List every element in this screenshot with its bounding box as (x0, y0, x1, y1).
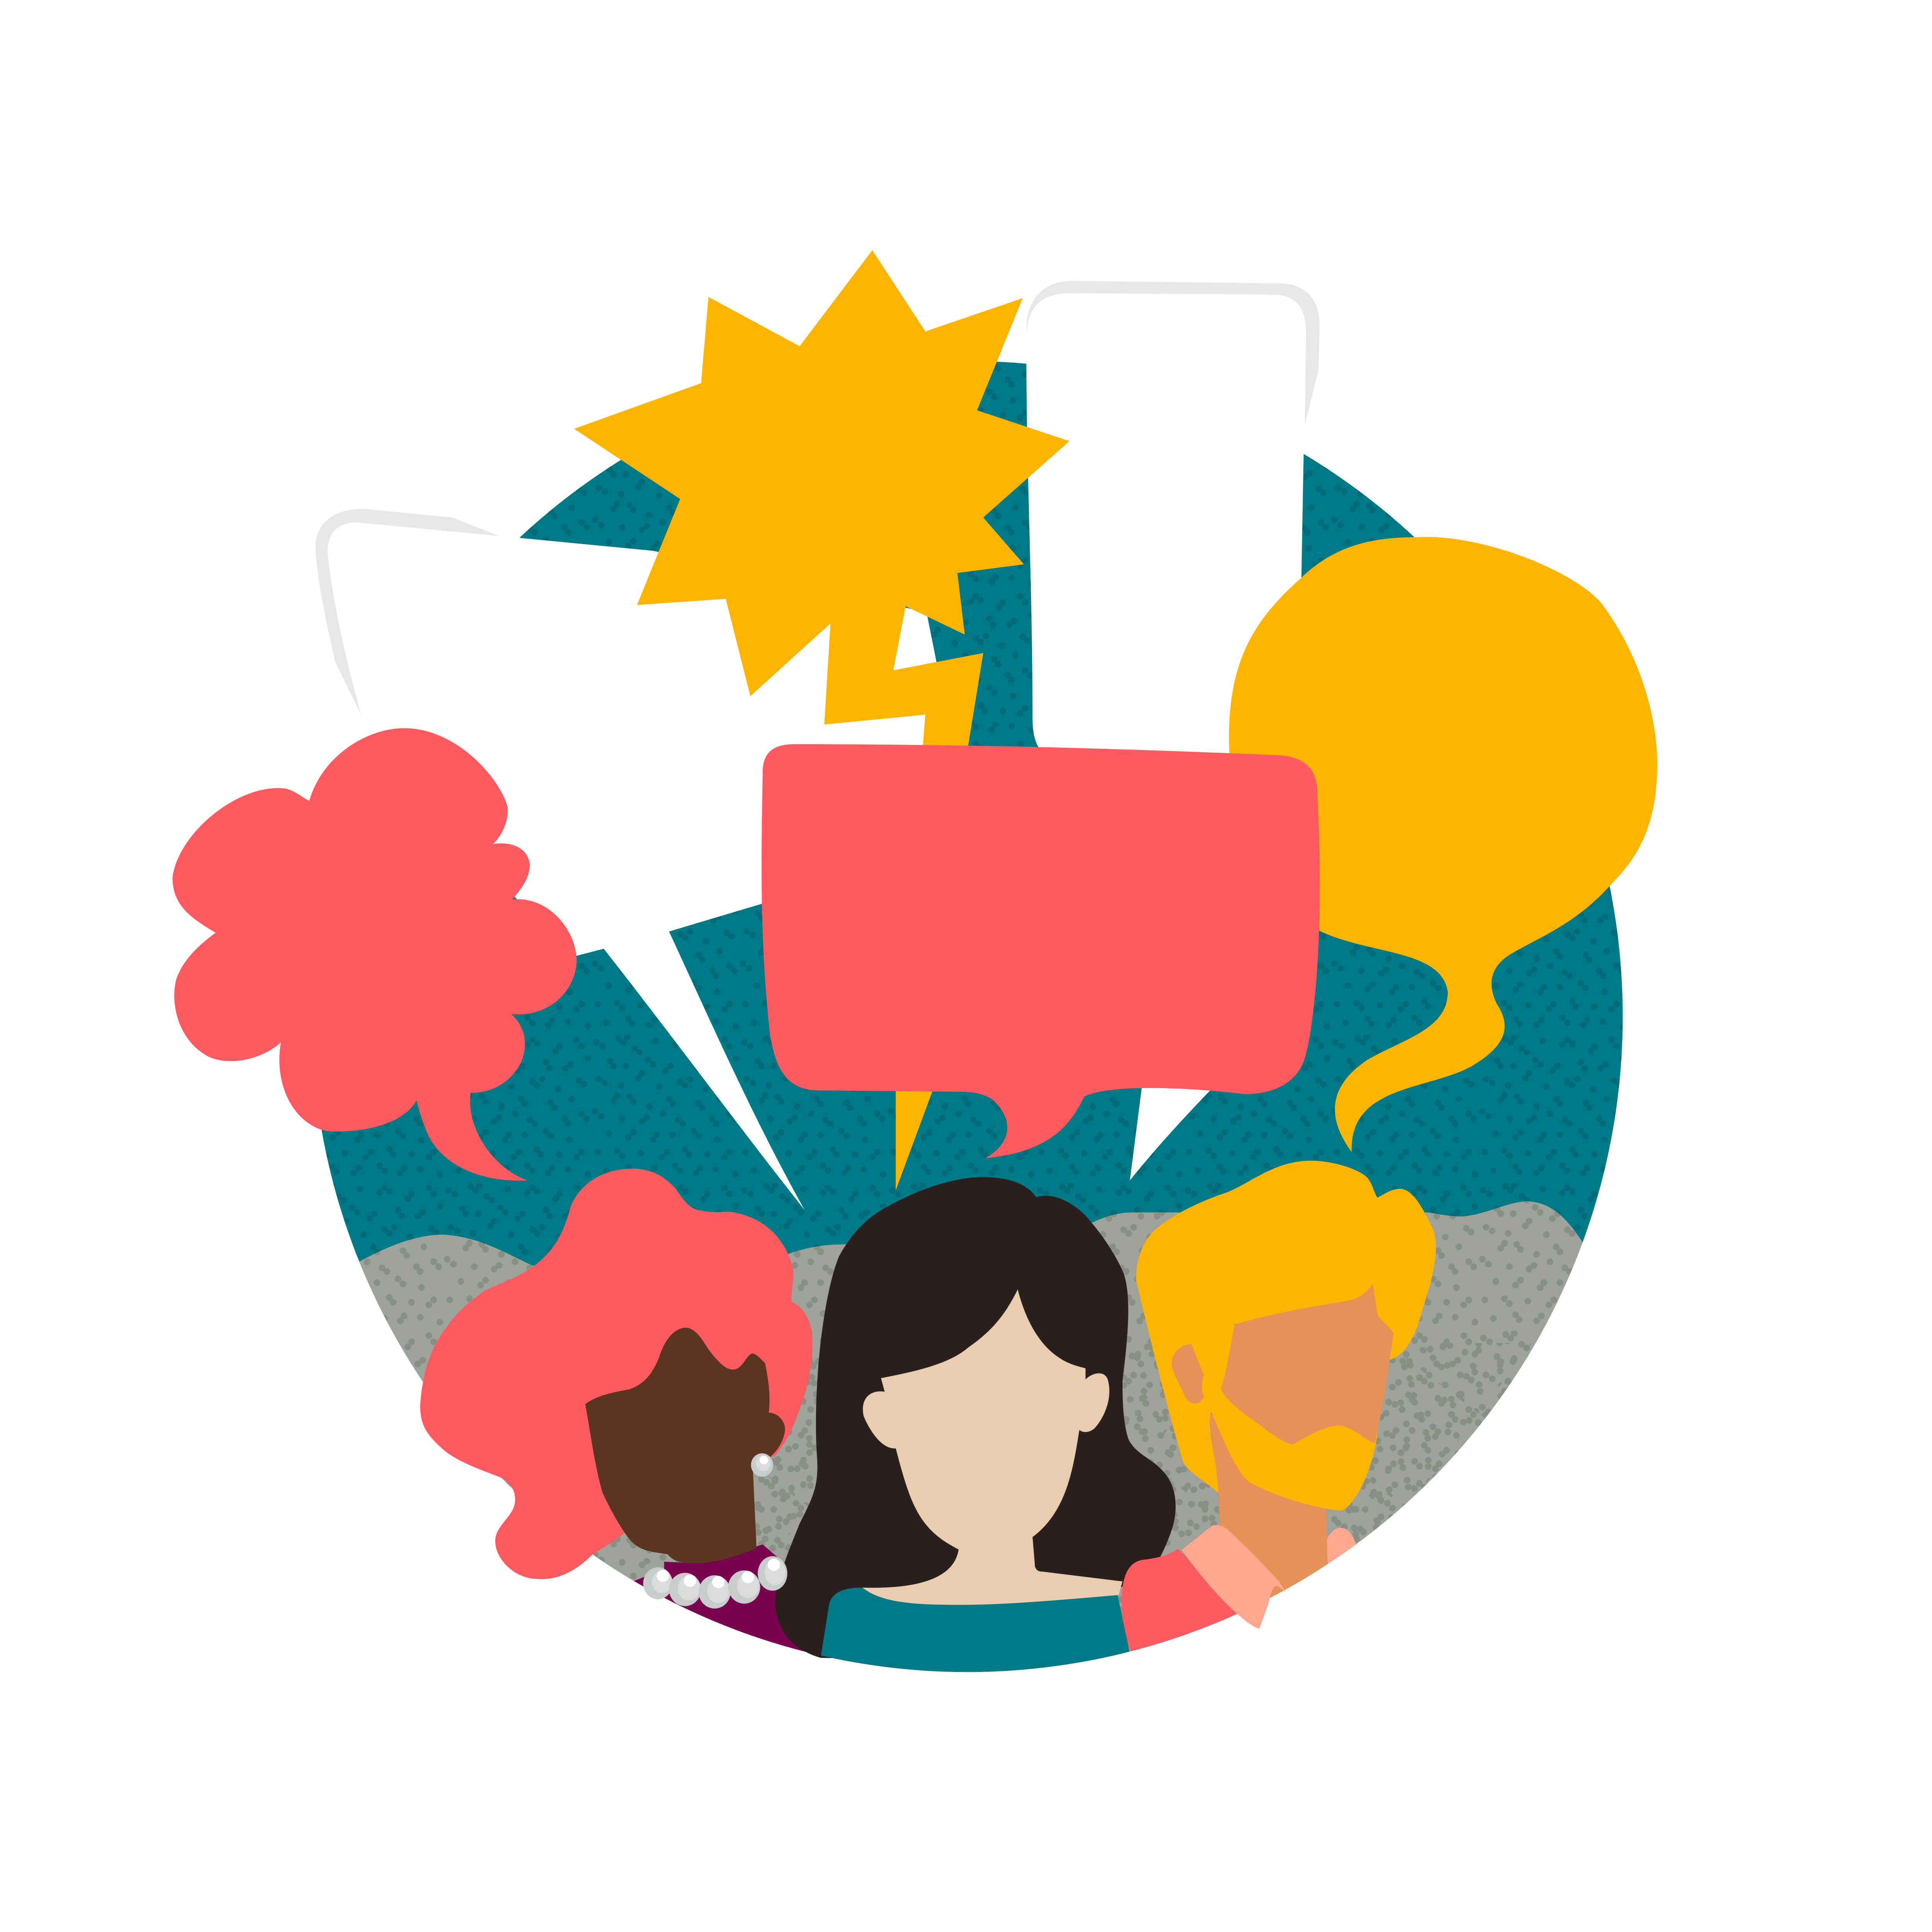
pearl necklace (643, 1556, 787, 1609)
speech bubble: red rectangle (762, 744, 1320, 1158)
person: woman with dark hair (775, 1177, 1176, 1690)
person: man with blond hair and beard (1122, 1161, 1436, 1658)
blond hair and beard (1136, 1161, 1436, 1510)
earring (751, 1453, 773, 1477)
red sleeve (1122, 1549, 1272, 1658)
dark hair (775, 1177, 1176, 1659)
collar behind neck (1327, 1528, 1364, 1591)
brown face and neck (585, 1328, 785, 1563)
neck (1209, 1412, 1329, 1628)
ear (1172, 1344, 1204, 1403)
speech bubble: yellow rounded right (1229, 537, 1657, 1152)
collar (1182, 1525, 1285, 1629)
face (1221, 1284, 1394, 1444)
teal top (821, 1588, 1135, 1690)
grey hills ground with speckle (359, 1201, 1583, 1672)
person: woman with red hair (420, 1169, 839, 1678)
speech bubble: white left with grey corner (315, 509, 936, 1210)
speech bubble: white tall right with grey corner (1026, 281, 1320, 1180)
illustration: people talking with speech bubbles (172, 250, 1657, 1672)
speech bubble: red cloud (172, 728, 577, 1180)
red hair (420, 1169, 813, 1579)
speech bubble: yellow starburst with lightning tail (574, 250, 1070, 1190)
background circle: teal with speckle (312, 361, 1623, 1672)
skin face and neck (862, 1289, 1122, 1605)
maroon top (634, 1544, 837, 1659)
